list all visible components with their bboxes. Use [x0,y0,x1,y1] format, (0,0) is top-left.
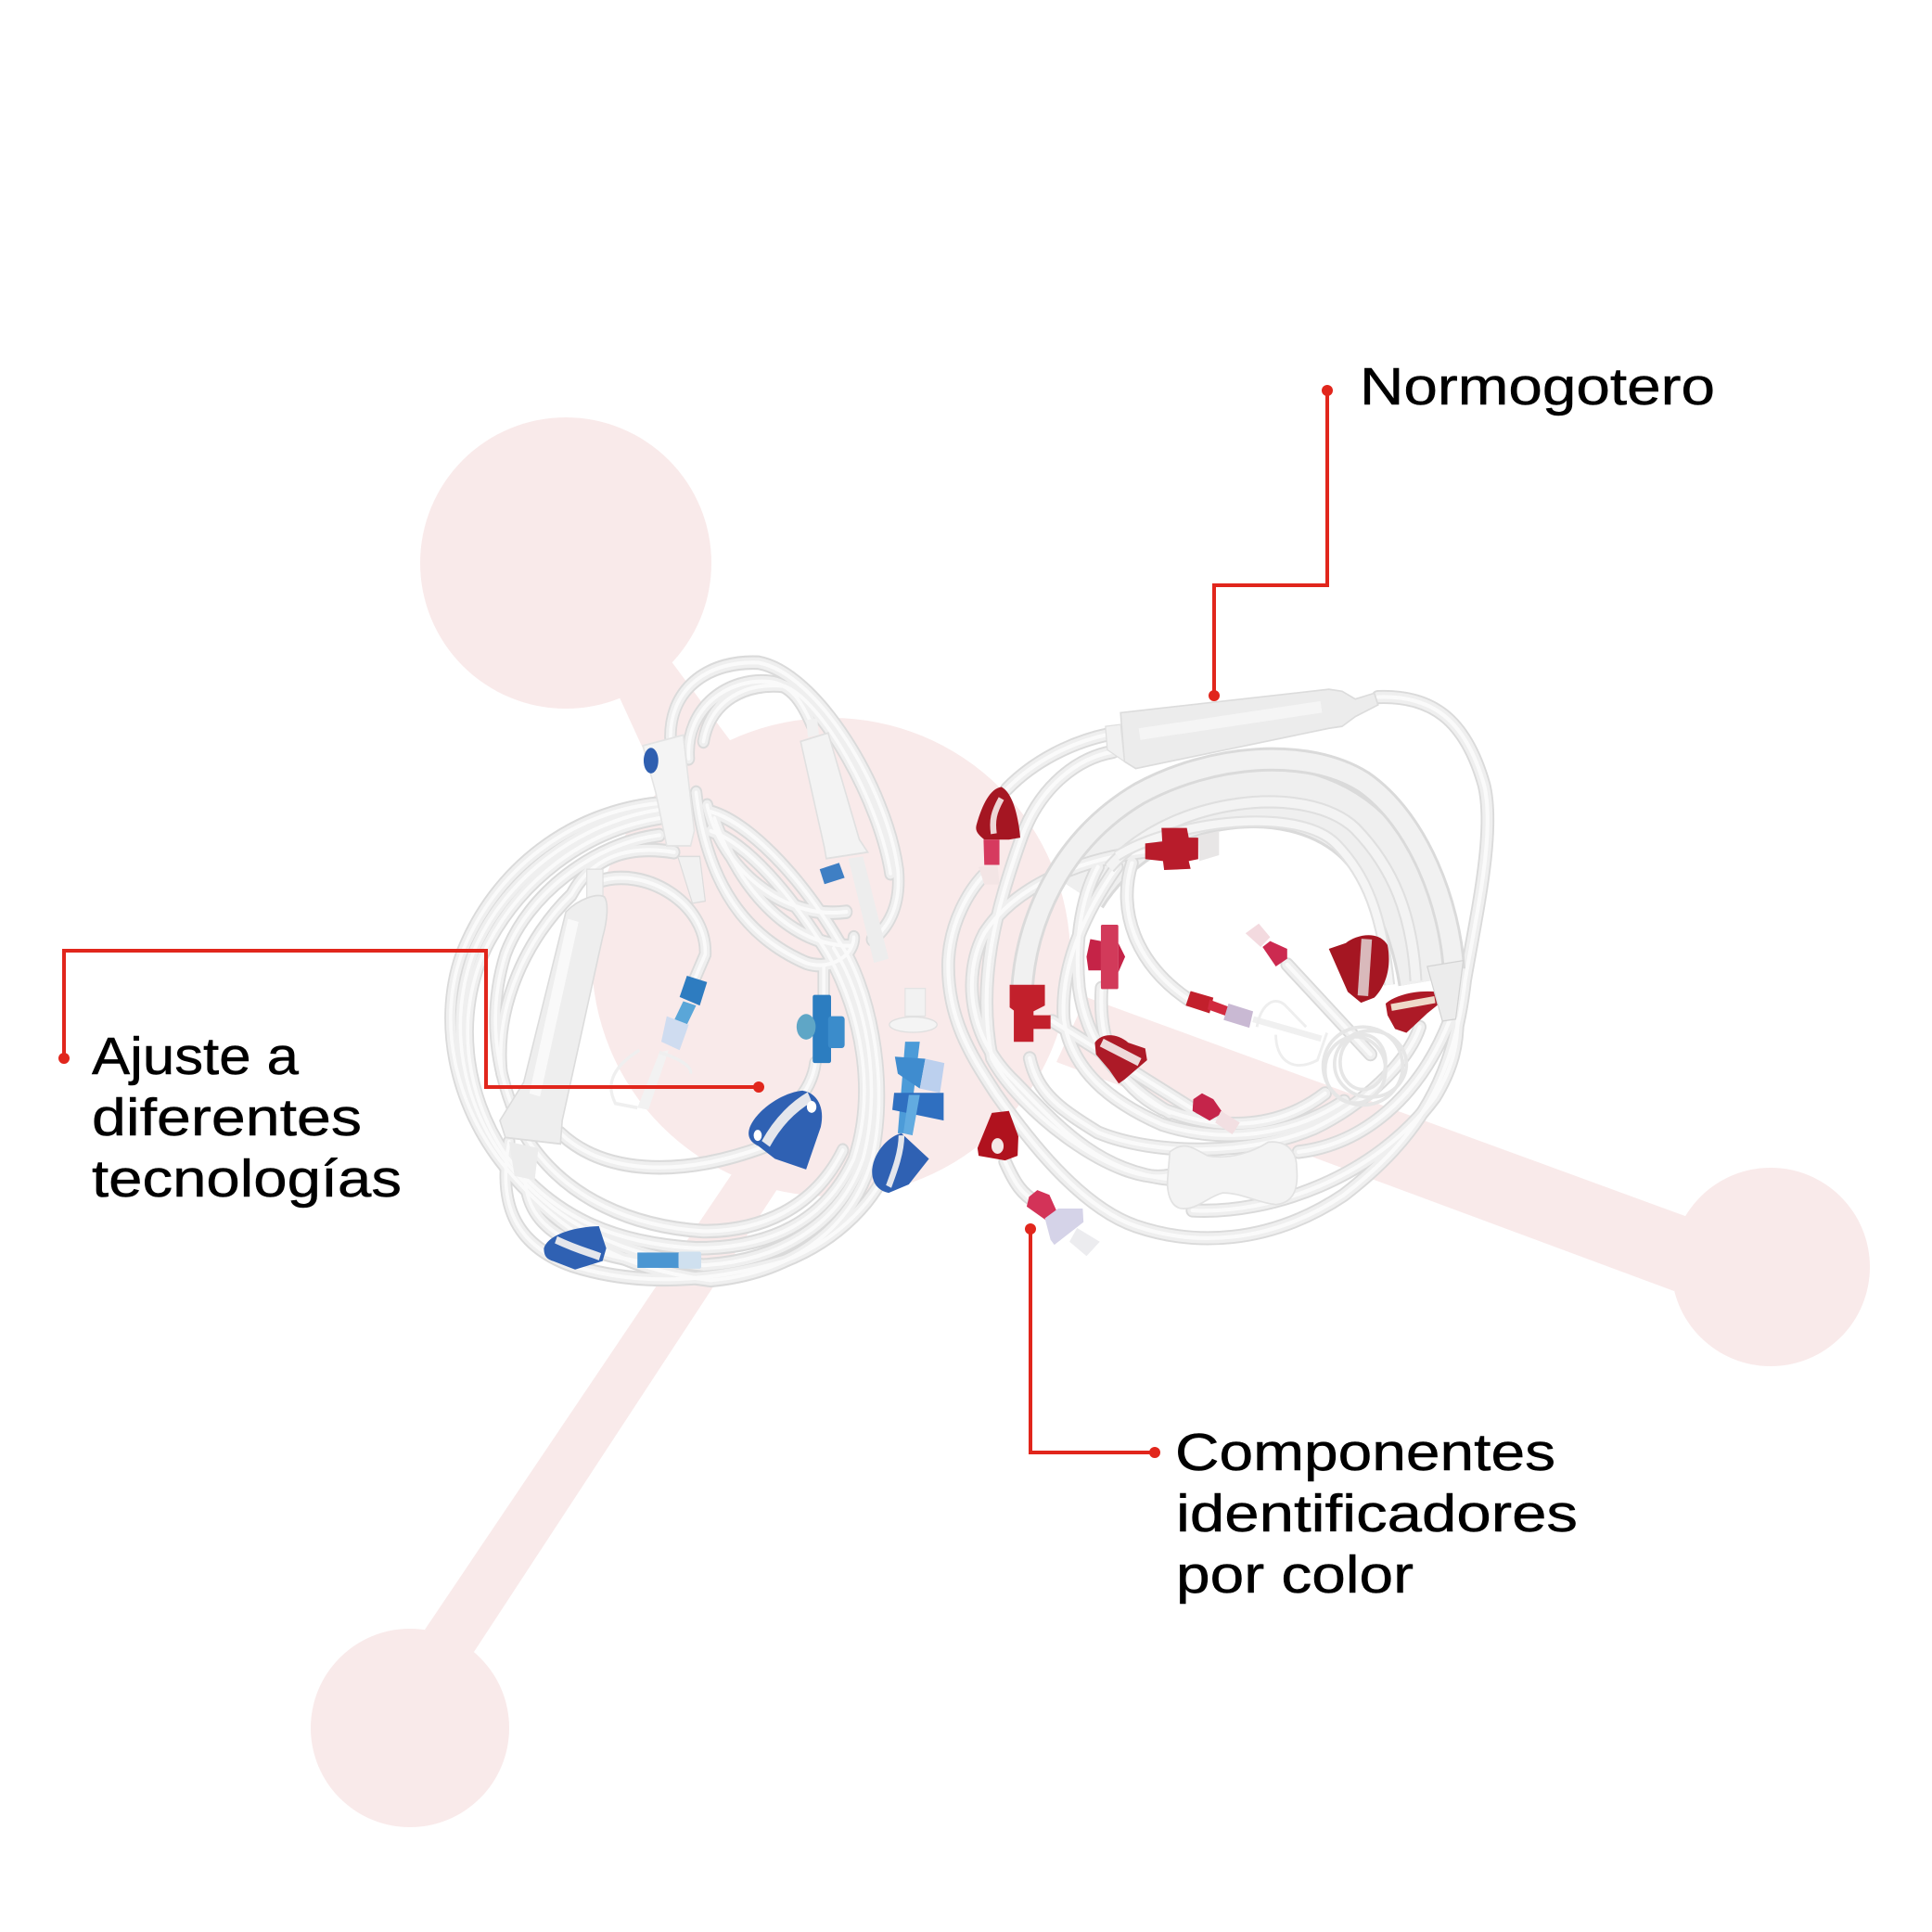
label: por color [1176,1545,1414,1605]
label: Ajuste a [92,1027,299,1086]
leader line [64,951,759,1087]
drip chamber: upper left with blue cap [643,736,705,903]
label: Componentes [1175,1423,1555,1482]
circle: bottom left [311,1629,509,1827]
tube: ring band base [1077,796,1429,981]
arm: bottom left [425,1118,797,1652]
circle: central hub [592,718,1070,1196]
callout: Normogotero [1209,357,1715,701]
tube: thick ring [1022,760,1453,989]
dot [1322,385,1333,396]
dot [1149,1447,1160,1458]
callout: Ajuste a diferentes tecnologías [58,951,764,1209]
label: diferentes [92,1088,362,1147]
circle: top left [420,417,711,709]
connector: red and lilac luer [1185,992,1327,1066]
label: Normogotero [1360,357,1715,416]
drip chamber: left large [500,869,607,1180]
tubes: left coil [451,662,899,1280]
label: tecnologías [92,1149,402,1209]
drip chamber: normogotero [1106,689,1378,769]
clamp: red right upper [1329,935,1388,1003]
connector: pink cross [1086,925,1125,989]
connector: pink tip centre [1246,924,1287,966]
label: identificadores [1176,1484,1578,1543]
connector: blue cross [797,995,845,1063]
connector: pink end [1193,1094,1240,1134]
dot [753,1081,764,1093]
leader line [1030,1229,1155,1452]
product: blue-coded tubing set [451,662,944,1280]
tubes: right coil [948,697,1488,1238]
connector: pink and lilac filter [1027,1190,1100,1256]
coil [1324,1027,1406,1105]
clamp: red lower left [978,1111,1018,1160]
clamp: red top left [976,787,1020,885]
dialyzer connector body [1168,1142,1297,1209]
connector: blue inline bottom [637,1252,701,1269]
arm: top left [619,660,835,965]
drip chamber: upper right [800,718,889,963]
label [1175,1423,1578,1605]
clamp: red middle [1094,1035,1147,1083]
product: red-coded tubing set [948,689,1488,1256]
clamp: large blue [748,1091,822,1170]
leader line [1214,390,1327,696]
clamp: blue bottom left [544,1226,607,1270]
callout: Componentes identificadores por color [1025,1223,1578,1605]
dot [58,1053,70,1064]
circle: right [1671,1168,1870,1366]
connector: red cap top [1145,828,1219,870]
connector: blue luer [611,976,707,1110]
connector: blue vented with filter [889,989,944,1135]
clamp: red right lower [1386,992,1439,1033]
arm: right [1056,997,1693,1291]
dot [1209,690,1220,701]
background: pink molecule shape [311,417,1870,1827]
connector: red T [1010,985,1051,1042]
clamp: blue lower right [872,1133,929,1193]
label [92,1027,402,1209]
dot [1025,1223,1036,1235]
connector: clear right [1427,961,1464,1021]
